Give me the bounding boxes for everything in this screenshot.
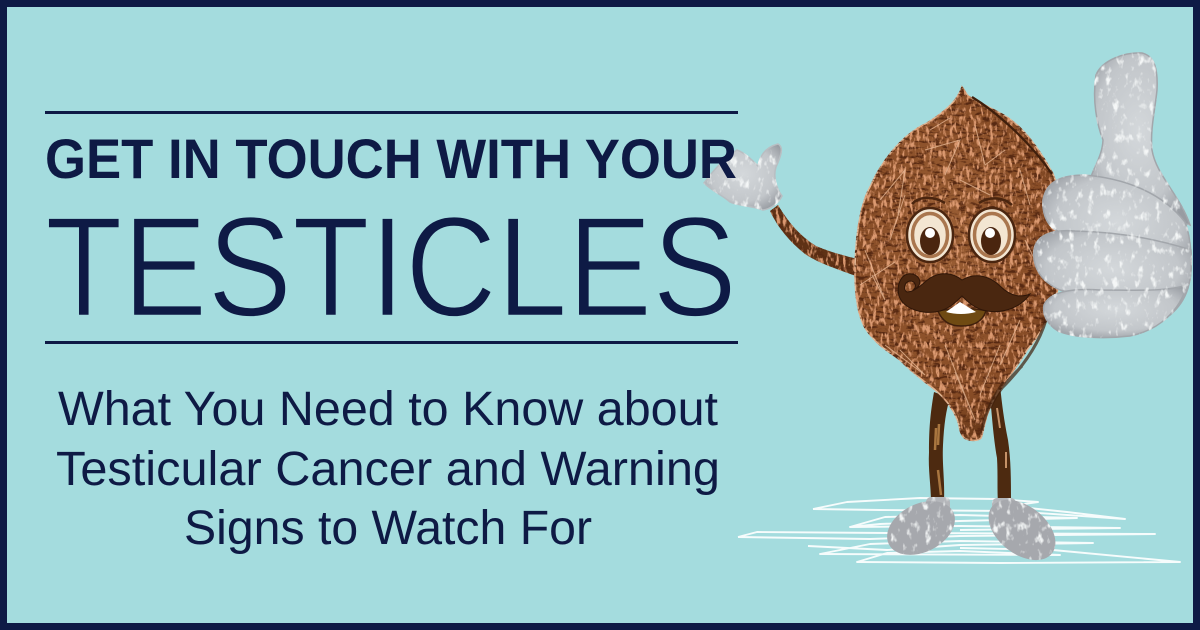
coconut fibres	[860, 118, 1040, 420]
moustache	[898, 274, 1030, 312]
mouth	[938, 302, 986, 326]
right leg	[989, 385, 1011, 503]
subtitle: Signs to Watch For	[184, 502, 592, 555]
mascot: coconut character	[704, 53, 1191, 572]
right leg highlight	[997, 408, 1006, 468]
subtitle: What You Need to Know about	[58, 383, 718, 436]
right eyebrow	[979, 198, 1012, 205]
lower finger	[1044, 285, 1187, 338]
subtitle: Testicular Cancer and Warning	[56, 443, 720, 496]
left eyebrow	[912, 198, 945, 204]
left leg highlight	[935, 424, 941, 495]
left leg	[929, 392, 950, 503]
upper finger	[1043, 175, 1191, 280]
lower shading	[982, 312, 1048, 430]
coconut dark edge	[972, 97, 1052, 174]
subtitle	[56, 383, 720, 555]
big thumbs-up hand	[1034, 53, 1191, 338]
left eye	[907, 208, 953, 262]
thumb	[1088, 53, 1190, 225]
ground scribble	[738, 498, 1180, 563]
right eye	[969, 208, 1015, 262]
arm	[770, 205, 858, 276]
top rule	[45, 111, 738, 114]
right shoe	[977, 488, 1067, 572]
middle finger	[1034, 231, 1191, 315]
heading: testicles: TESTICLES	[45, 188, 737, 347]
left shoe	[878, 490, 964, 566]
coconut body	[855, 87, 1063, 440]
heading: get in touch: GET IN TOUCH WITH YOUR	[45, 127, 737, 190]
small gloved hand	[704, 144, 782, 210]
bottom rule	[45, 341, 738, 344]
